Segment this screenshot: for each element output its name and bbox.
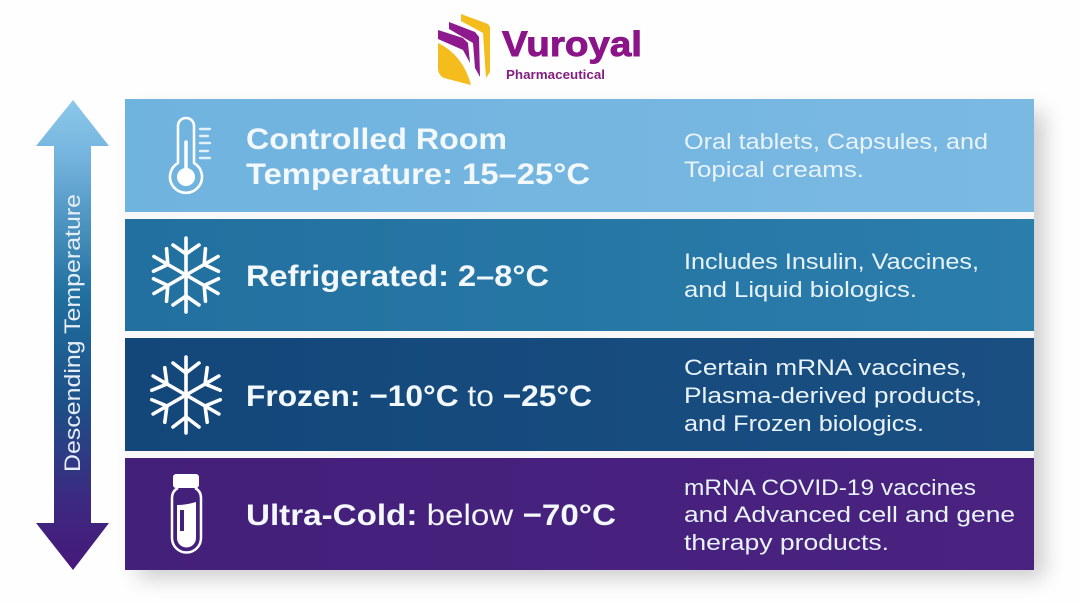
description: therapy products. (684, 530, 889, 555)
heading (246, 123, 590, 191)
row background (125, 338, 1034, 451)
icon: snowflake (147, 357, 225, 433)
panel shadow (138, 112, 1044, 578)
descending temperature arrow (36, 100, 109, 570)
description (684, 249, 979, 302)
panel: controlled room temperature (125, 99, 1034, 212)
panel: frozen (125, 338, 1034, 451)
heading: Frozen: −10°C to −25°C (246, 380, 592, 413)
description (684, 355, 982, 436)
panel: refrigerated (125, 219, 1034, 331)
description: Oral tablets, Capsules, and (684, 129, 988, 154)
description: Topical creams. (684, 157, 864, 182)
icon: vial (172, 474, 201, 552)
icon: thermometer (170, 118, 210, 193)
heading: Refrigerated: 2–8°C (246, 260, 549, 293)
description: Includes Insulin, Vaccines, (684, 249, 979, 274)
description: Certain mRNA vaccines, (684, 355, 967, 380)
row background (125, 219, 1034, 331)
description (684, 475, 1015, 555)
logo (438, 14, 642, 85)
heading: Controlled Room (246, 123, 507, 156)
description: and Liquid biologics. (684, 277, 917, 302)
panel: ultra-cold (125, 458, 1034, 570)
description: mRNA COVID-19 vaccines (684, 475, 976, 500)
description: and Advanced cell and gene (684, 502, 1015, 527)
logo wordmark: Vuroyal (502, 25, 642, 64)
icon: snowflake (147, 238, 225, 312)
description (684, 129, 988, 182)
row background (125, 99, 1034, 212)
arrow shape (36, 100, 109, 570)
description: and Frozen biologics. (684, 411, 924, 436)
arrow label: Descending Temperature (60, 194, 85, 472)
heading: Ultra-Cold: below −70°C (246, 499, 616, 532)
logo tagline: Pharmaceutical (506, 68, 605, 82)
description: Plasma-derived products, (684, 383, 982, 408)
logo mark (438, 14, 490, 85)
heading: Temperature: 15–25°C (246, 158, 590, 191)
row background (125, 458, 1034, 570)
